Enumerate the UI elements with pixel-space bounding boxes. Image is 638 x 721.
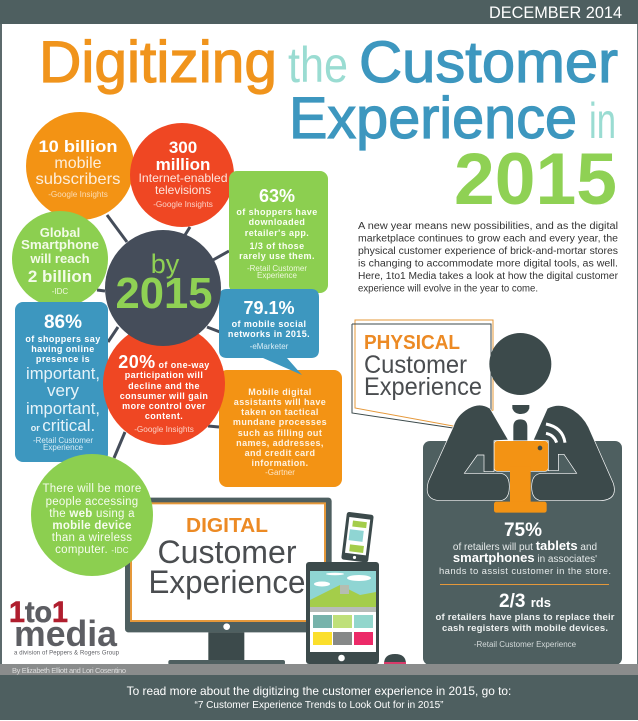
- callout: 86%: or critical.: [31, 416, 95, 435]
- title: 2015: [454, 139, 617, 220]
- header bar: [0, 0, 638, 24]
- logo: 1to1 media: media: [14, 613, 118, 654]
- digital heading: [148, 515, 306, 600]
- circle: web access: [31, 454, 153, 576]
- hub: by 2015: [105, 230, 221, 346]
- circle: 20%: consumer will gain: [120, 391, 208, 401]
- circle: 20%: -Google Insights: [134, 425, 194, 434]
- circle: 300 million: 300: [169, 138, 197, 157]
- title: [39, 30, 618, 220]
- callout: 63%: 1/3 of those: [249, 241, 305, 251]
- intro paragraph: marketplace continues to grow each and every year, the: [358, 234, 618, 244]
- circle: 10 billion: 10 billion: [38, 138, 118, 156]
- intro paragraph: A new year means new possibilities, and as the digital: [358, 221, 618, 232]
- circle: 10 billion: -Google Insights: [48, 190, 108, 199]
- callout: 79.1%: -eMarketer: [250, 342, 289, 351]
- physical heading: Customer: [364, 351, 467, 379]
- intro paragraph: Here, 1to1 Media takes a look at how the digital customer: [358, 271, 619, 282]
- figure: retail associate: [427, 333, 614, 513]
- callout: 63%: 63%: [259, 186, 295, 206]
- circle: 10 billion: subscribers: [36, 171, 120, 188]
- hub: by 2015: by: [151, 249, 180, 279]
- panel: physical stats: of retailers have plans to replace their: [436, 612, 615, 623]
- callout: mobile digital assistants: such as filling out: [238, 428, 322, 438]
- panel: physical stats: -Retail Customer Experience: [474, 640, 577, 649]
- title: Digitizing: [39, 30, 277, 95]
- digital heading: Customer: [158, 534, 297, 570]
- circle: 20%: [103, 323, 225, 445]
- callout: mobile digital assistants: and credit card: [245, 448, 315, 458]
- credit bar: By Elizabeth Elliott and Lori Cosentino: [12, 666, 126, 675]
- callout: 86%: 86%: [44, 312, 82, 333]
- circle: 300 million: televisions: [155, 183, 211, 197]
- panel: physical stats: [423, 333, 622, 665]
- circle: global smartphone: [12, 211, 108, 307]
- panel: physical stats: cash registers with mobile devices.: [442, 623, 608, 634]
- callout: mobile digital assistants: Mobile digital: [248, 387, 312, 397]
- header bar: DECEMBER 2014: [489, 4, 622, 22]
- callout: 63%: [229, 171, 328, 293]
- circle: web access: than a wireless: [52, 532, 132, 544]
- circle: global smartphone: will reach: [29, 251, 90, 266]
- footer: To read more about the digitizing the customer experience in 2015, go to:: [127, 684, 511, 698]
- intro paragraph: experience will evolve in the year to come.: [358, 284, 538, 294]
- callout: mobile digital assistants: information.: [251, 458, 309, 468]
- circle: global smartphone: 2 billion: [28, 267, 92, 286]
- callout: 86%: [15, 302, 108, 462]
- callout: 63%: Experience: [257, 271, 298, 280]
- circle: web access: the web using a: [49, 508, 135, 520]
- callout: 63%: of shoppers have: [236, 207, 318, 217]
- logo: 1to1 media: 1to1: [9, 596, 68, 629]
- circle: 300 million: million: [156, 155, 210, 174]
- digital heading: DIGITAL: [186, 515, 268, 537]
- circle: 10 billion: [26, 112, 134, 220]
- title: the: [288, 37, 348, 93]
- hub: by 2015: 2015: [116, 269, 212, 318]
- callout: 79.1%: networks in 2015.: [228, 329, 310, 339]
- circle: web access: people accessing: [46, 496, 138, 508]
- panel: physical stats: of retailers will put tablets and: [453, 538, 597, 553]
- logo: 1to1 media: [9, 596, 120, 656]
- title: Experience: [289, 86, 577, 151]
- circle: global smartphone: Smartphone: [21, 237, 99, 252]
- circle: 10 billion: mobile: [54, 155, 102, 172]
- circle: web access: There will be more: [42, 483, 142, 495]
- callout: mobile digital assistants: taken on tactical: [241, 407, 319, 417]
- footer: “7 Customer Experience Trends to Look Out for in 2015”: [194, 700, 444, 711]
- panel: physical stats: hands to assist customer in the store.: [439, 566, 611, 577]
- connector lines: [97, 215, 229, 458]
- physical heading: PHYSICAL: [364, 332, 460, 354]
- intro paragraph: physical customer experience of brick-and-mortar stores: [358, 246, 618, 257]
- callout: 86%: presence is: [36, 354, 90, 364]
- title: in: [589, 93, 616, 149]
- icon: smartphone: [341, 512, 374, 563]
- circle: 300 million: [130, 123, 234, 227]
- monitor: [125, 498, 332, 665]
- callout: 86%: having online: [31, 344, 95, 354]
- circle: 20%: decline and the: [128, 381, 200, 391]
- footer: [0, 675, 638, 720]
- intro paragraph: is changing to accommodate more digital tools, as well.: [358, 258, 618, 270]
- circle: global smartphone: Global: [40, 225, 80, 240]
- icon: tablet: [306, 562, 379, 664]
- physical callout box: [352, 320, 493, 428]
- panel: physical stats: smartphones in associates': [453, 550, 597, 565]
- callout: mobile digital assistants: [219, 370, 342, 487]
- callout: mobile digital assistants: -Gartner: [265, 468, 295, 477]
- icon: mouse: [384, 654, 406, 665]
- logo: 1to1 media: a division of Peppers & Rogers Group: [14, 650, 120, 656]
- callout: 86%: important,: [26, 399, 100, 418]
- callout: mobile digital assistants: assistants will have: [234, 397, 326, 407]
- circle: 300 million: -Google Insights: [153, 200, 213, 209]
- circle: 20%: participation will: [125, 370, 203, 380]
- callout: 79.1%: of mobile social: [232, 319, 306, 329]
- circle: web access: mobile device: [52, 520, 132, 532]
- circle: 300 million: Internet-enabled: [138, 171, 228, 185]
- digital heading: Experience: [148, 564, 306, 600]
- callout: 86%: of shoppers say: [25, 334, 101, 344]
- circle: 20%: content.: [145, 411, 183, 421]
- callout: 63%: downloaded: [249, 217, 305, 227]
- intro paragraph: [358, 221, 619, 294]
- circle: 20%: 20% of one-way: [118, 352, 210, 372]
- callout: 86%: very: [47, 381, 80, 400]
- physical heading: Experience: [364, 373, 482, 401]
- physical heading: [364, 332, 482, 401]
- callout: mobile digital assistants: names, addresses,: [236, 438, 324, 448]
- callout: 86%: important,: [26, 364, 100, 383]
- callout: 63%: retailer's app.: [245, 228, 309, 238]
- credit bar: [0, 664, 638, 675]
- title: Customer: [359, 30, 618, 95]
- circle: web access: computer. -IDC: [55, 544, 129, 556]
- circle: global smartphone: -IDC: [52, 287, 68, 296]
- panel: physical stats: 2/3 rds: [499, 591, 551, 612]
- callout: 79.1%: [219, 289, 319, 375]
- panel: physical stats: 75%: [504, 520, 542, 541]
- callout: mobile digital assistants: mundane processes: [233, 417, 327, 427]
- circle: 20%: more control over: [122, 401, 206, 411]
- callout: 63%: -Retail Customer: [247, 264, 307, 273]
- callout: 86%: Experience: [43, 443, 84, 452]
- callout: 63%: rarely use them.: [239, 251, 315, 261]
- callout: 86%: -Retail Customer: [33, 436, 93, 445]
- callout: 79.1%: 79.1%: [243, 298, 295, 318]
